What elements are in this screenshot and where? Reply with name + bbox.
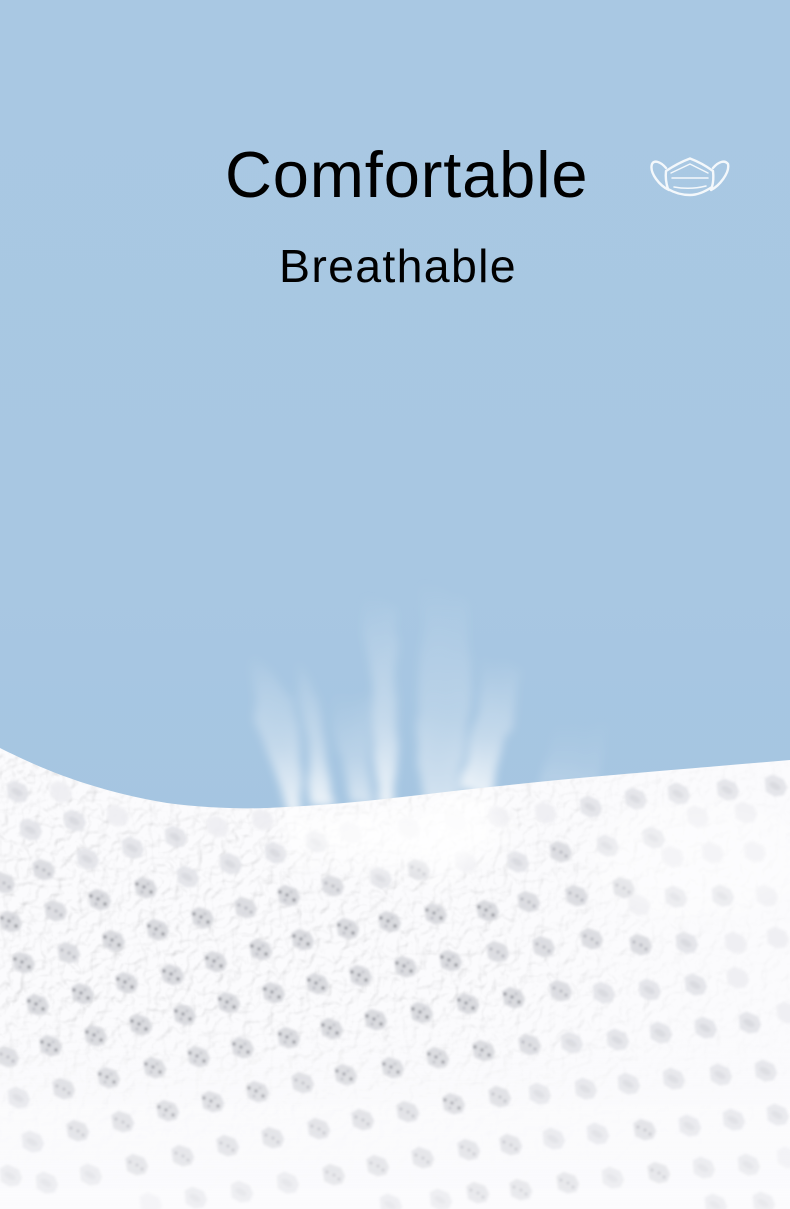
white nonwoven fabric — [0, 740, 790, 1209]
perforation holes — [0, 773, 790, 1209]
icon: face mask — [651, 158, 728, 195]
light glow on fabric under steam — [293, 797, 730, 902]
soft fade over lower fabric — [2, 1070, 774, 1209]
steam rising from fabric — [250, 580, 612, 812]
blue sky background — [0, 0, 790, 820]
title: Comfortable: Comfortable — [225, 138, 588, 211]
subtitle: Breathable: Breathable — [279, 240, 517, 292]
wrinkled fabric texture — [0, 754, 648, 1066]
